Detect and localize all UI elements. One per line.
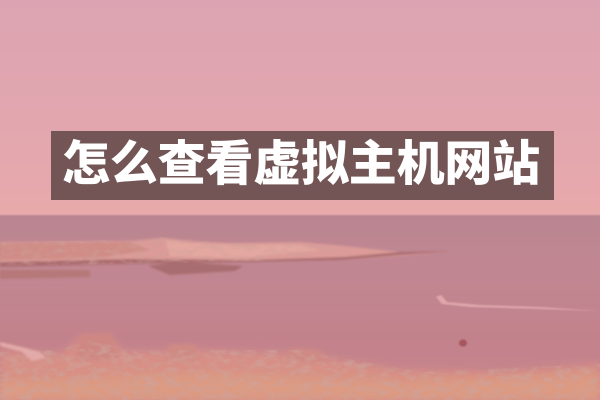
- title: 拟: [301, 138, 349, 191]
- title: 查: [158, 138, 206, 191]
- title: 么: [110, 138, 158, 191]
- headland: [0, 238, 457, 279]
- foreground shore vegetation: [0, 334, 600, 400]
- background photo: pink-tinted coastal scene: [0, 214, 600, 400]
- title banner: [51, 131, 554, 200]
- title: [62, 138, 540, 191]
- title: 怎: [62, 138, 110, 191]
- title: 网: [444, 138, 492, 191]
- headland texture: [2, 238, 286, 266]
- title: 看: [205, 138, 253, 191]
- boat wake: [436, 295, 600, 346]
- title: 机: [397, 138, 445, 191]
- title: 站: [492, 138, 540, 191]
- title: 主: [349, 138, 397, 191]
- title: 虚: [253, 138, 301, 191]
